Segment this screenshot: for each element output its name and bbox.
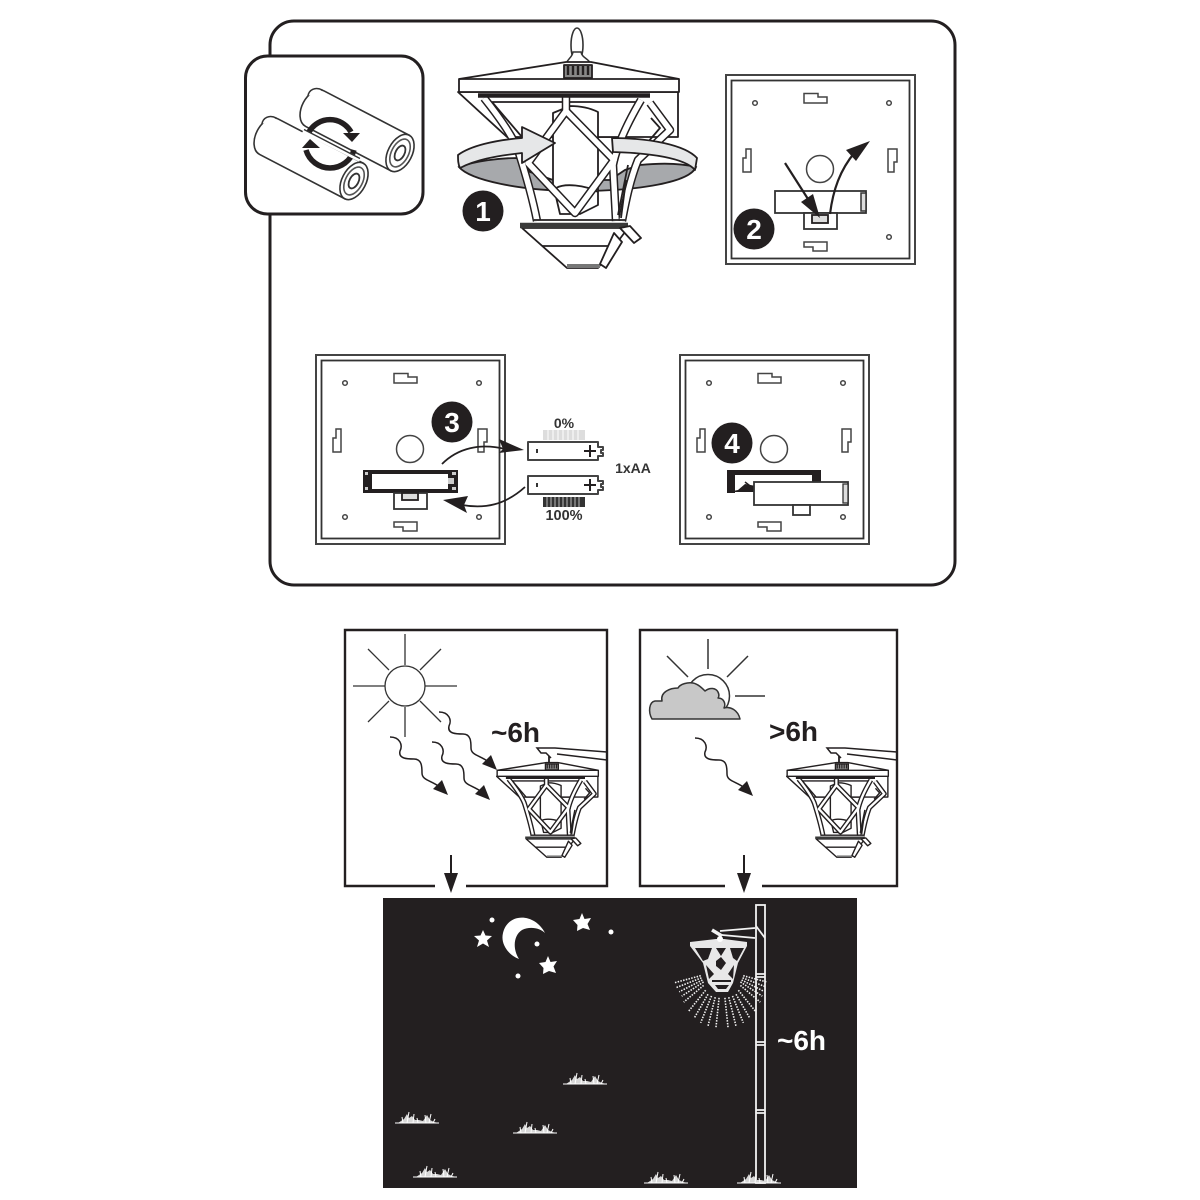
panel: full sun, about 6 hours charging <box>345 630 607 893</box>
number badge 2: 2 <box>746 214 762 245</box>
panel: night scene <box>383 898 857 1188</box>
icon: front battery <box>248 113 374 204</box>
number badge 4 <box>712 422 752 464</box>
label: battery type: 1xAA <box>615 460 651 476</box>
number badge 1: 1 <box>475 196 491 227</box>
lantern illustration <box>787 748 897 857</box>
arrow: down to night <box>737 855 751 893</box>
icon: sun behind cloud <box>667 639 765 718</box>
gauge: full: 100% <box>545 508 583 524</box>
grass tufts <box>395 1073 781 1183</box>
number badge 3 <box>432 402 472 442</box>
icon: back battery <box>294 85 420 176</box>
panel: battery replacement steps <box>270 21 955 585</box>
gauge: empty: 0% <box>554 415 575 431</box>
lamp post <box>712 905 765 1183</box>
step 2: opening battery cover <box>726 75 915 264</box>
icon: sun <box>353 634 457 737</box>
icon: replace arrows <box>302 120 360 168</box>
step 4: inserting the battery <box>680 355 869 544</box>
number badge 1 <box>462 190 504 232</box>
step 3: swapping the AA battery <box>316 355 651 544</box>
light rays <box>674 976 767 1028</box>
number badge 3: 3 <box>444 407 460 438</box>
number badge 2 <box>734 208 774 250</box>
lantern illustration <box>497 742 607 857</box>
number badge 4: 4 <box>724 428 740 459</box>
label: charge time: ~6h <box>491 717 540 748</box>
arrow: down to night <box>444 855 458 893</box>
icon: sun rays arrows <box>390 712 497 800</box>
gauge: empty <box>543 415 585 440</box>
callout: replace the batteries <box>246 56 423 214</box>
lantern: lit <box>690 936 747 992</box>
panel: cloudy, over 6 hours charging <box>640 630 897 893</box>
label: charge time: >6h <box>769 716 818 747</box>
icon: cloud <box>650 683 740 719</box>
icon: weak sun ray arrow <box>695 738 753 796</box>
icon: moon and stars <box>474 913 614 978</box>
gauge: full <box>543 497 585 524</box>
step 1: opening the lantern <box>458 28 697 268</box>
label: light duration: ~6h <box>777 1025 826 1056</box>
